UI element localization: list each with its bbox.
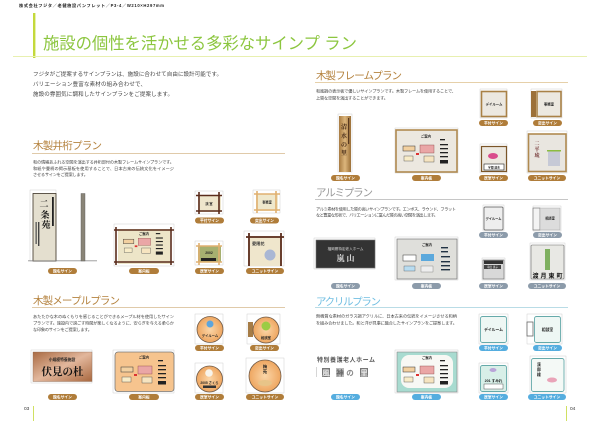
panel: aluminium plan — [314, 187, 568, 289]
labels: frame: 平付サイン — [484, 120, 503, 126]
unit sign: acrylic — [530, 356, 566, 393]
room sign: aluminium: 幸田 恵子 — [487, 265, 498, 269]
flat sign: aluminium — [483, 205, 504, 231]
map sign: maple — [113, 350, 174, 393]
description: aluminium — [316, 206, 456, 218]
name sign: maple: 伏見の杜 — [42, 364, 84, 379]
labels: maple: 案内板 — [138, 394, 150, 400]
projecting sign: acrylic — [527, 314, 562, 344]
description: igeta: させるサインをご提案します。 — [33, 171, 88, 178]
flat sign: maple — [195, 314, 223, 344]
intro text: フジタがご提案するサインプランは、施設に合わせて自由に設計可能です。 — [33, 70, 222, 78]
flat sign: igeta: 談 室 — [205, 201, 213, 206]
panel: acrylic plan — [315, 296, 568, 400]
description: frame: 上質な空間を演出することができます。 — [316, 94, 388, 102]
labels: aluminium: 案内板 — [421, 284, 432, 288]
flat sign: maple: デイルーム — [202, 333, 219, 338]
flat sign: aluminium: デイルーム — [486, 216, 502, 221]
room sign: igeta — [195, 241, 223, 265]
flat sign: igeta — [195, 191, 223, 214]
description: frame — [316, 88, 456, 102]
labels: frame: ユニットサイン — [534, 176, 560, 180]
projecting sign: frame: 事務室 — [544, 102, 555, 106]
unit sign: maple — [246, 358, 284, 393]
labels: aluminium: ユニットサイン — [534, 284, 560, 288]
labels: aluminium: 突出サイン — [538, 232, 557, 238]
labels: frame: 案内板 — [421, 176, 432, 180]
unit sign: maple: 梅 — [263, 363, 268, 370]
projecting sign: acrylic: 相談室 — [542, 327, 553, 332]
projecting sign: maple — [247, 314, 280, 344]
page number 03 — [24, 406, 34, 421]
description: acrylic: を組み合わせました。和と洋が見事に融合したサインプランをご提案します。 — [316, 320, 457, 326]
labels: igeta: 館名サイン — [53, 268, 72, 274]
labels: maple: 居室サイン — [200, 394, 219, 400]
projecting sign: igeta — [253, 190, 280, 213]
projecting sign: frame — [531, 89, 562, 118]
description: acrylic: 無機質な素材のガラス調アクリルに、日本古来の伝統をイメージさせる和柄 — [316, 312, 457, 320]
map sign: igeta — [114, 224, 174, 266]
unit sign: acrylic: 漢 — [537, 362, 541, 367]
flat sign: acrylic: デイルーム — [484, 327, 503, 332]
heading: igeta: 木製井桁プラン — [33, 139, 102, 152]
flat sign: frame: デイルーム — [486, 102, 503, 106]
name sign: igeta: 条 — [40, 208, 50, 221]
name sign: igeta: 二 — [39, 197, 49, 210]
labels: igeta: ユニットサイン — [252, 268, 278, 274]
page header note: 株式会社フジタ／老健施設パンフレット／P3-4／W210×H297mm — [19, 2, 164, 9]
unit sign: frame: 琉 — [534, 152, 540, 159]
unit sign: acrylic: 郎 — [537, 367, 541, 372]
map sign: acrylic: ご案内 — [422, 355, 433, 360]
page number 04: 04 — [570, 406, 576, 412]
unit sign: frame — [527, 131, 567, 173]
flat sign: acrylic — [479, 314, 508, 344]
labels: frame — [331, 120, 566, 181]
description: maple: あたたかな木のぬくもりを感じることができるメープル材を使用したサイン — [33, 313, 174, 320]
name sign: acrylic: 特別養護老人ホーム — [317, 356, 375, 364]
labels: igeta: 案内板 — [138, 268, 150, 274]
labels: acrylic: 突出サイン — [538, 346, 557, 350]
room sign: frame: 宇都 道夫 — [488, 166, 500, 170]
map sign: aluminium — [395, 237, 458, 280]
labels: maple: ユニットサイン — [252, 394, 278, 400]
page number 03: 03 — [24, 406, 30, 412]
description: aluminium: など豊富な形状で、バリエーションに富んだ質の高い空間を演出します。 — [316, 212, 438, 218]
description: maple: な印象のサインをご提案します。 — [33, 326, 92, 333]
labels: igeta: 平付サイン — [200, 218, 219, 223]
unit sign: igeta: 愛隆花 — [252, 240, 265, 247]
heading: maple: 木製メープルプラン — [33, 294, 120, 307]
name sign: frame: 清 — [341, 122, 347, 131]
title: 施設の個性を活かせる多彩なサインプ ラン — [43, 35, 357, 53]
description: maple: プランです。施設内で過ごす時間が楽しくなるように、安らぎを与える柔らか — [33, 320, 175, 326]
name sign: frame: 里 — [341, 148, 347, 157]
labels: acrylic: 居室サイン — [484, 394, 503, 400]
map sign: frame: ご案内 — [421, 134, 432, 138]
description: igeta: 和の情緒あふれる空間を演出する井桁部付の木製フレームサインプランです。 — [33, 158, 174, 166]
panel: wooden igeta plan — [28, 139, 285, 274]
name sign: maple: 小規模特養施設 — [49, 357, 75, 362]
name sign: aluminium: 嵐 山 — [336, 253, 354, 264]
labels: frame: 館名サイン — [336, 176, 355, 180]
labels: maple — [48, 345, 284, 400]
name sign: acrylic: の — [346, 368, 354, 378]
name sign: frame: の — [341, 140, 347, 149]
labels: igeta — [48, 218, 284, 274]
room sign: frame — [480, 144, 507, 173]
name sign: maple — [31, 350, 92, 383]
unit sign: frame: 二 — [534, 140, 540, 147]
labels: aluminium: 館名サイン — [336, 284, 355, 288]
labels: maple: 突出サイン — [255, 346, 274, 350]
description: igeta — [33, 158, 174, 178]
name sign: igeta: 苑 — [41, 218, 51, 231]
map sign: acrylic — [395, 350, 458, 393]
unit sign: frame: 平 — [534, 146, 540, 153]
projecting sign: aluminium: 相談室 — [545, 216, 556, 220]
map sign: igeta: ご案内 — [139, 231, 150, 236]
labels: maple: 館名サイン — [53, 394, 72, 400]
room sign: maple — [195, 363, 223, 393]
name sign: acrylic: 神 — [336, 368, 344, 378]
labels: acrylic: ユニットサイン — [534, 394, 560, 400]
labels: aluminium: 居室サイン — [484, 284, 503, 288]
description: igeta: 和紙や畳柄の掲示基板を使用することで、日本古来の伝統文化をイメージ — [33, 165, 174, 172]
panel: wooden frame plan — [315, 69, 568, 181]
name sign: igeta — [28, 190, 97, 261]
name sign: aluminium — [314, 238, 375, 269]
room sign: igeta: 2002 — [205, 251, 213, 255]
projecting sign: aluminium — [533, 206, 561, 231]
description: acrylic — [316, 312, 457, 326]
labels: aluminium: 平付サイン — [484, 232, 503, 238]
flat sign: frame — [480, 89, 507, 118]
labels: frame: 居室サイン — [484, 176, 503, 180]
labels: acrylic: 案内板 — [421, 394, 432, 400]
heading: aluminium: アルミプラン — [316, 187, 373, 199]
heading: frame: 木製フレームプラン — [316, 69, 402, 82]
labels: aluminium — [331, 232, 566, 289]
heading: acrylic: アクリルプラン — [316, 296, 381, 308]
room sign: acrylic: 201 すみれ — [485, 378, 503, 383]
labels: maple: 平付サイン — [200, 346, 219, 350]
description: frame: 和風調の表示板で優しいサインプランです。木製フレームを使用することで、 — [316, 88, 456, 94]
labels: igeta: 居室サイン — [200, 268, 219, 274]
labels: acrylic: 館名サイン — [336, 394, 355, 400]
unit sign: acrylic: 樓 — [537, 372, 541, 377]
name sign: frame — [338, 114, 352, 172]
labels: frame: 突出サイン — [538, 120, 557, 126]
name sign: acrylic: 里 — [360, 368, 368, 378]
unit sign: maple: 苑 — [263, 368, 268, 375]
intro text — [33, 70, 222, 98]
name sign: frame: 水 — [341, 131, 347, 140]
projecting sign: maple: 相談室 — [261, 335, 272, 340]
map sign: aluminium: ご案内 — [422, 242, 433, 247]
intro text: 施設の雰囲気に調和したサインプランをご提案します。 — [33, 90, 173, 98]
room sign: aluminium — [482, 258, 505, 280]
panel: wooden maple plan — [31, 294, 285, 400]
room sign: acrylic — [479, 363, 508, 393]
description: maple — [33, 313, 175, 333]
name sign: acrylic: 風 — [322, 368, 330, 378]
intro text: バリエーション豊富な素材の組み合わせで、 — [33, 80, 146, 88]
page number 04 — [566, 406, 576, 421]
name sign: aluminium: 福岡県特定老人ホーム — [328, 246, 364, 251]
description: aluminium: アルミ素材を使用した質の高いサインプランです。エンボス、ラウンド、フラット — [316, 206, 456, 212]
labels: igeta: 突出サイン — [255, 218, 274, 223]
unit sign: aluminium — [530, 243, 565, 280]
projecting sign: igeta: 事務室 — [262, 200, 273, 204]
map sign: frame — [395, 128, 458, 173]
map sign: maple: ご案内 — [139, 354, 150, 360]
unit sign: igeta — [244, 231, 284, 266]
room sign: maple: 2005 さくら — [200, 380, 219, 385]
name sign: acrylic — [316, 356, 375, 378]
unit sign: aluminium: 渡月東町 — [532, 272, 562, 280]
labels: acrylic — [331, 345, 566, 400]
labels: acrylic: 平付サイン — [484, 346, 503, 350]
